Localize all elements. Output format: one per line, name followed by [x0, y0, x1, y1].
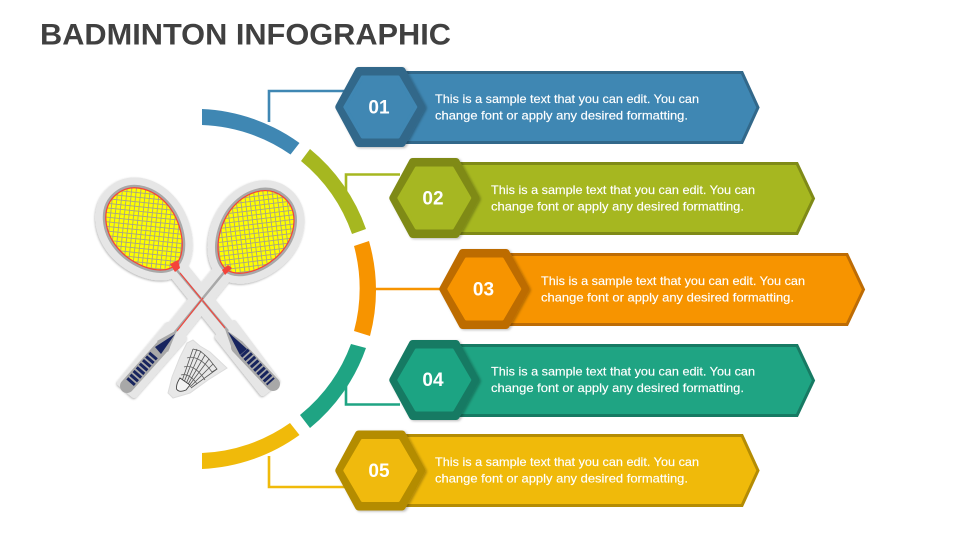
arc: teal [300, 344, 366, 428]
item 05 [339, 434, 758, 506]
hexagon badge [393, 162, 475, 234]
connector: 03 [372, 288, 450, 290]
hexagon badge [443, 253, 525, 325]
number: 03 [473, 280, 494, 300]
shuttlecock [168, 340, 227, 398]
text: This is a sample text that you can edit. You can [435, 92, 699, 106]
item 04 [393, 344, 814, 416]
text: This is a sample text that you can edit. You can [435, 455, 699, 469]
arc: blue [202, 109, 300, 154]
number: 04 [422, 370, 444, 391]
banner [385, 436, 758, 506]
hexagon badge [339, 71, 421, 143]
text: change font or apply any desired formatting. [491, 200, 744, 214]
arc: green [301, 149, 366, 234]
arc ring [202, 109, 376, 469]
text: This is a sample text that you can edit. You can [541, 274, 805, 288]
text: change font or apply any desired formatting. [435, 472, 688, 486]
item 03 [443, 253, 864, 325]
sticker backing [91, 173, 309, 395]
racket: left [91, 173, 273, 384]
racket: right [127, 176, 309, 386]
connector: 02 [346, 174, 400, 206]
item 01 [339, 71, 758, 143]
hexagon badge [339, 434, 421, 506]
text: change font or apply any desired formatting. [541, 290, 794, 304]
illustration: crossed badminton rackets and shuttlecock [91, 173, 309, 398]
text: This is a sample text that you can edit. You can [491, 183, 755, 197]
banner [439, 346, 814, 416]
hexagon badge [393, 344, 475, 416]
number: 05 [368, 461, 390, 482]
banner [385, 72, 758, 142]
connector: 04 [346, 374, 400, 404]
connector: 01 [269, 91, 345, 122]
connector: 05 [269, 456, 345, 487]
number: 02 [422, 188, 444, 210]
number: 01 [368, 98, 390, 118]
banner [489, 254, 864, 324]
title: BADMINTON INFOGRAPHIC [40, 18, 451, 52]
arc: yellow [202, 423, 300, 469]
text: change font or apply any desired formatting. [491, 381, 744, 395]
banner [439, 164, 814, 234]
arc: orange [354, 241, 376, 336]
text: This is a sample text that you can edit. You can [491, 364, 755, 378]
text: change font or apply any desired formatting. [435, 108, 688, 122]
item 02 [393, 162, 814, 234]
